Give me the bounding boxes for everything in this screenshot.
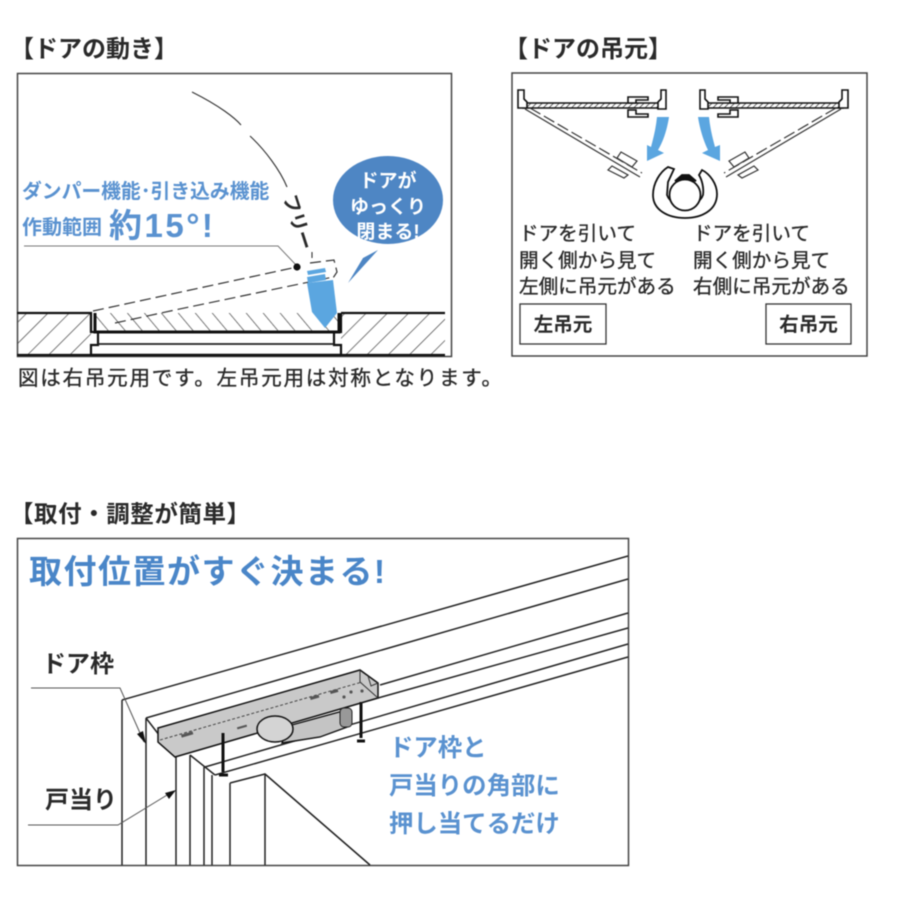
- label box: left hinge: [520, 304, 606, 344]
- text: blue instructions: 戸当りの角部に: [389, 773, 560, 800]
- label: door stop: [28, 787, 176, 825]
- door section drawing: [17, 313, 445, 355]
- label: door frame: [31, 651, 146, 744]
- heading: door hinge side: 【ドアの吊元】: [504, 36, 672, 63]
- panel: installation: [18, 538, 628, 866]
- screw: left: [219, 733, 228, 775]
- text: right hinge: 開く側から見て: [693, 250, 830, 272]
- label: door frame: ドア枠: [42, 651, 114, 678]
- panel: door movement: [17, 74, 452, 356]
- text: left hinge: [519, 223, 676, 298]
- text: right hinge: 右側に吊元がある: [693, 276, 850, 298]
- door frame drawing: [122, 556, 628, 865]
- icon: person from above: [653, 167, 717, 218]
- headline: 取付位置がすぐ決まる!: [29, 553, 385, 590]
- right door plan: [700, 90, 848, 178]
- heading: door movement: 【ドアの動き】: [10, 36, 178, 63]
- label box: left hinge: 左吊元: [534, 314, 592, 336]
- callout bubble: ドアが: [359, 169, 417, 192]
- door swing arc: [192, 92, 312, 258]
- text: right hinge: [693, 223, 850, 298]
- free label: フリー: [278, 192, 316, 253]
- label box: right hinge: [766, 304, 851, 344]
- heading: installation: 【取付・調整が簡単】: [10, 500, 250, 527]
- callout bubble: [333, 156, 443, 283]
- text: left hinge: 開く側から見て: [519, 250, 656, 272]
- text: damper range: [22, 180, 269, 244]
- text: damper range: ダンパー機能･引き込み機能: [22, 180, 269, 203]
- open door dashed outline: [93, 260, 337, 323]
- callout bubble: ゆっくり: [350, 196, 426, 218]
- text: blue instructions: [389, 735, 560, 838]
- caption: 図は右吊元用です。左吊元用は対称となります。: [18, 367, 502, 390]
- text: blue instructions: 押し当てるだけ: [389, 811, 560, 838]
- callout bubble: 閉まる!: [356, 222, 420, 243]
- text: damper range: 約15°!: [109, 207, 215, 244]
- text: blue instructions: ドア枠と: [389, 735, 487, 762]
- blue closing arrow: [307, 268, 337, 328]
- pivot dot and leader: [24, 246, 301, 271]
- door closer unit: [158, 670, 378, 757]
- label box: right hinge: 右吊元: [779, 314, 838, 336]
- text: left hinge: ドアを引いて: [519, 223, 636, 245]
- panel: door hinge side: [512, 73, 867, 356]
- blue arrows: [647, 117, 720, 161]
- text: damper range: 作動範囲: [22, 216, 102, 239]
- left door plan: [518, 90, 666, 178]
- text: right hinge: ドアを引いて: [693, 223, 810, 245]
- text: left hinge: 左側に吊元がある: [519, 276, 676, 298]
- label: door stop: 戸当り: [45, 787, 117, 814]
- screw: right: [357, 702, 365, 741]
